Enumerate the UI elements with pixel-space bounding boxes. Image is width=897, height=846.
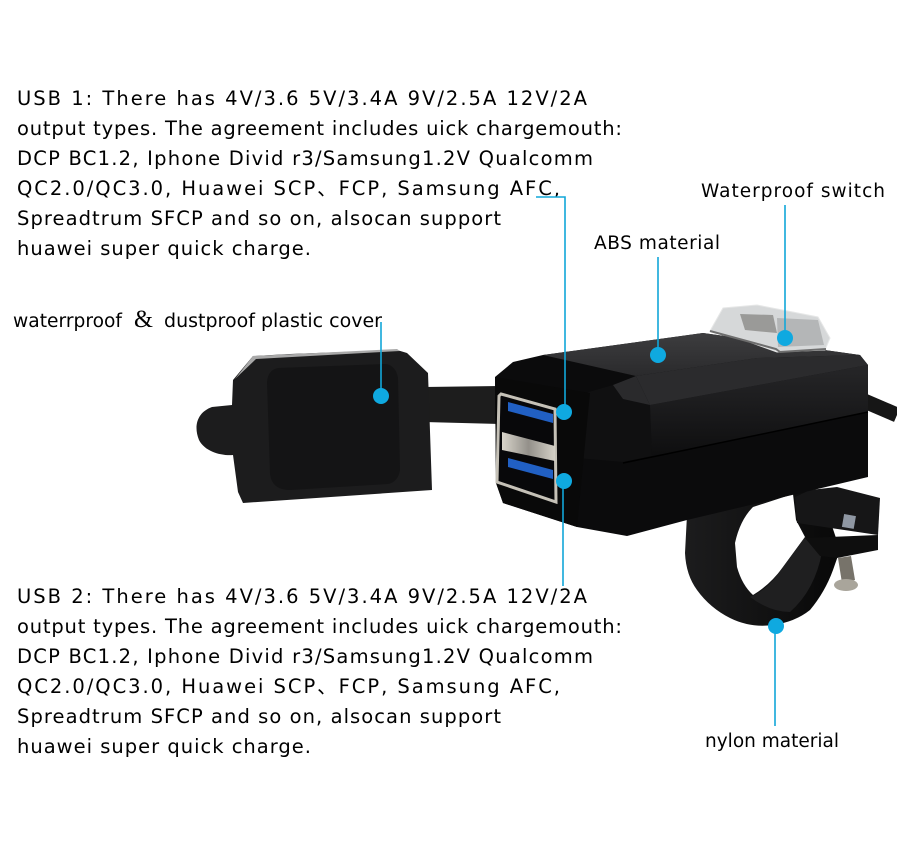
text block: USB 1 description: QC2.0/QC3.0, Huawei SCP、FCP, Samsung AFC, — [17, 177, 560, 200]
port 2 tongue — [508, 458, 553, 479]
text block: USB 2 description: output types. The agreement includes uick chargemouth: — [17, 615, 622, 638]
label: waterproof and dustproof plastic cover: dustproof plastic cover — [164, 311, 382, 332]
callout: USB 1 pointer — [536, 197, 572, 420]
text block: USB 1 description: Spreadtrum SFCP and so on, alsocan support — [17, 207, 501, 230]
housing silhouette — [495, 333, 868, 536]
text block: USB 1 description: huawei super quick charge. — [17, 237, 311, 260]
text block: USB 1 description: DCP BC1.2, Iphone Divid r3/Samsung1.2V Qualcomm — [17, 147, 593, 170]
icon: waterproof switch cap — [710, 305, 830, 352]
upper shell side — [650, 365, 868, 457]
icon: rubber cover with strap — [197, 349, 500, 503]
icon: USB port block — [495, 377, 590, 527]
text block: USB 2 description: QC2.0/QC3.0, Huawei SCP、FCP, Samsung AFC, — [17, 675, 560, 698]
text block: USB 1 description — [17, 87, 622, 260]
label: waterproof and dustproof plastic cover: & — [134, 306, 153, 333]
text block: USB 2 description: Spreadtrum SFCP and so on, alsocan support — [17, 705, 501, 728]
port 1 tongue — [508, 402, 553, 423]
text block: USB 1 description: output types. The agreement includes uick chargemouth: — [17, 117, 622, 140]
callout: nylon material pointer — [768, 618, 784, 726]
icon: charger housing — [495, 333, 868, 536]
label: ABS material: ABS material — [594, 233, 720, 254]
text block: USB 2 description: DCP BC1.2, Iphone Divid r3/Samsung1.2V Qualcomm — [17, 645, 593, 668]
top surface — [543, 333, 860, 376]
label: waterproof and dustproof plastic cover — [13, 306, 382, 333]
callout: ABS material pointer — [650, 257, 666, 363]
label: waterproof switch: Waterproof switch — [701, 181, 885, 202]
callout: waterproof switch pointer — [777, 205, 793, 346]
icon: nylon handlebar clamp — [685, 487, 880, 626]
text block: USB 2 description: USB 2: There has 4V/3.6 5V/3.4A 9V/2.5A 12V/2A — [17, 585, 588, 608]
text block: USB 2 description — [17, 585, 622, 758]
callout: USB 2 pointer — [556, 473, 572, 586]
seam — [623, 412, 868, 463]
text block: USB 2 description: huawei super quick charge. — [17, 735, 311, 758]
label: waterproof and dustproof plastic cover: waterrproof — [13, 311, 122, 332]
chamfer corner — [613, 376, 650, 405]
text block: USB 1 description: USB 1: There has 4V/3.6 5V/3.4A 9V/2.5A 12V/2A — [17, 87, 588, 110]
label: nylon material: nylon material — [705, 731, 839, 752]
upper shell front — [577, 378, 652, 462]
metal band — [502, 432, 555, 461]
metal frame — [497, 394, 556, 502]
bevel band — [636, 355, 868, 405]
icon: power cable — [862, 400, 897, 415]
callout: plastic cover pointer — [373, 322, 389, 404]
